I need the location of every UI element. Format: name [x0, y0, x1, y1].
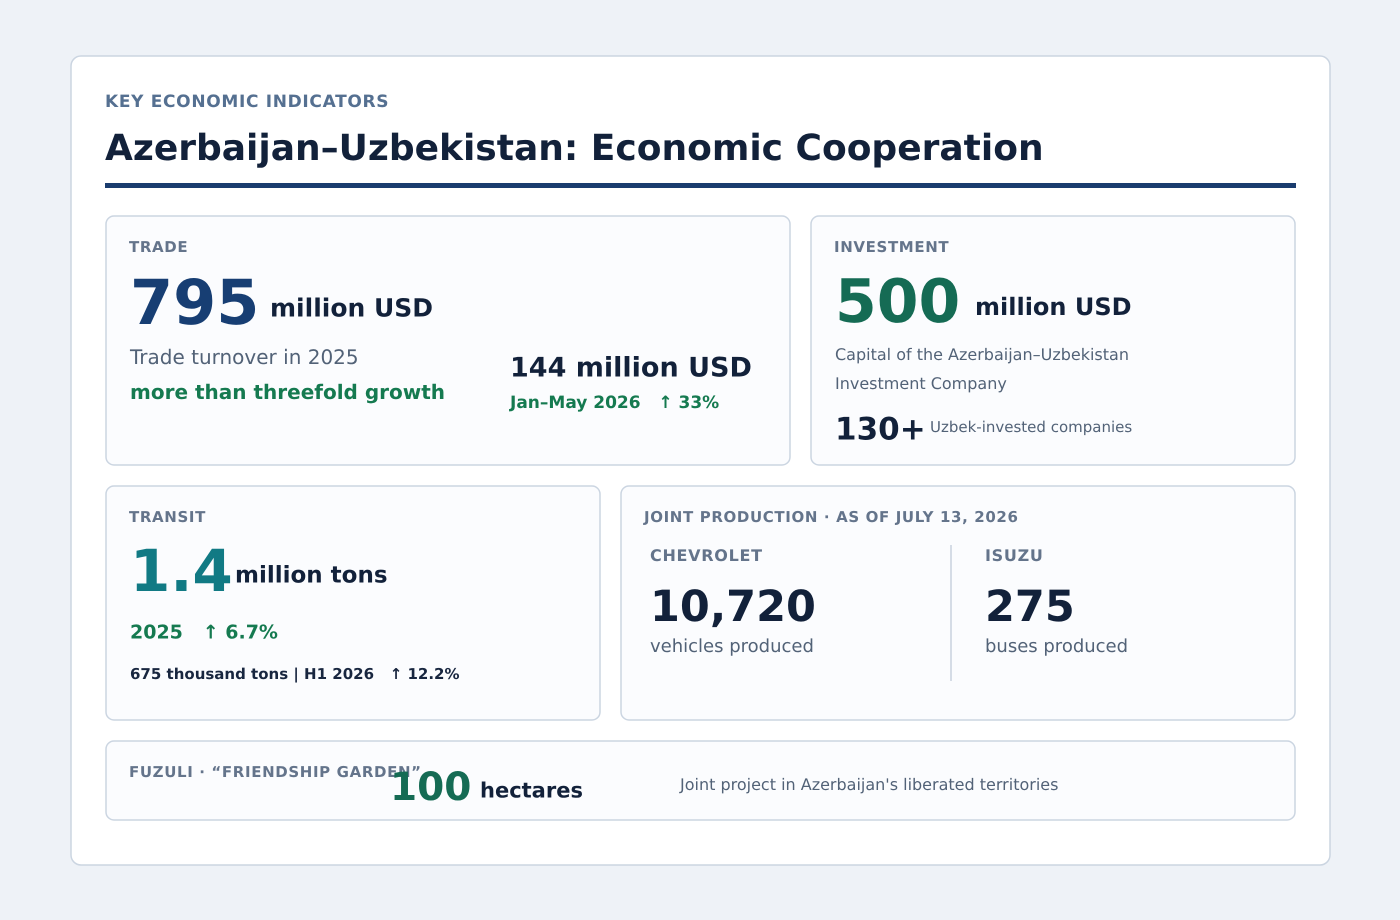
investment description: Capital of the Azerbaijan–Uzbekistan	[835, 345, 1129, 364]
chevrolet column	[650, 546, 816, 657]
trade value: 795	[130, 266, 259, 339]
panel: joint production	[621, 486, 1295, 720]
companies value: 130+	[835, 412, 926, 448]
title rule	[105, 183, 1296, 188]
chevrolet note: vehicles produced	[650, 636, 814, 657]
chevrolet value: 10,720	[650, 582, 816, 632]
trade label: TRADE	[129, 238, 188, 256]
transit unit: million tons	[235, 562, 388, 588]
fuzuli label: FUZULI · “FRIENDSHIP GARDEN”	[129, 763, 422, 781]
panel: transit	[106, 486, 600, 720]
fuzuli description: Joint project in Azerbaijan's liberated territories	[679, 775, 1058, 794]
panel: investment	[811, 216, 1295, 465]
fuzuli unit: hectares	[480, 778, 583, 802]
fuzuli value: 100	[390, 765, 471, 810]
investment value: 500	[835, 267, 960, 337]
transit value: 1.4	[130, 537, 233, 605]
main panel	[71, 56, 1330, 865]
trade secondary growth: Jan–May 2026 ↑ 33%	[509, 393, 719, 413]
chevrolet column: CHEVROLET	[650, 546, 763, 565]
trade unit: million USD	[270, 294, 433, 322]
trade secondary value: 144 million USD	[510, 352, 752, 384]
isuzu value: 275	[985, 582, 1075, 632]
trade description: Trade turnover in 2025	[129, 345, 359, 369]
panel: investment: Investment Company	[835, 374, 1007, 393]
joint production label: JOINT PRODUCTION · AS OF JULY 13, 2026	[643, 508, 1019, 526]
isuzu column	[985, 546, 1128, 657]
panel: fuzuli	[106, 741, 1295, 820]
eyebrow heading: KEY ECONOMIC INDICATORS	[105, 92, 389, 112]
investment unit: million USD	[975, 293, 1132, 321]
transit label: TRANSIT	[129, 508, 206, 526]
transit growth: 2025 ↑ 6.7%	[130, 622, 278, 644]
title: Azerbaijan–Uzbekistan: Economic Cooperation	[105, 128, 1044, 169]
transit H1: 675 thousand tons | H1 2026 ↑ 12.2%	[130, 665, 460, 683]
panel: trade	[106, 216, 790, 465]
isuzu note: buses produced	[985, 636, 1128, 657]
isuzu column: ISUZU	[985, 546, 1044, 565]
companies label: Uzbek-invested companies	[930, 418, 1132, 436]
investment label: INVESTMENT	[834, 238, 949, 256]
trade growth: more than threefold growth	[130, 380, 445, 404]
